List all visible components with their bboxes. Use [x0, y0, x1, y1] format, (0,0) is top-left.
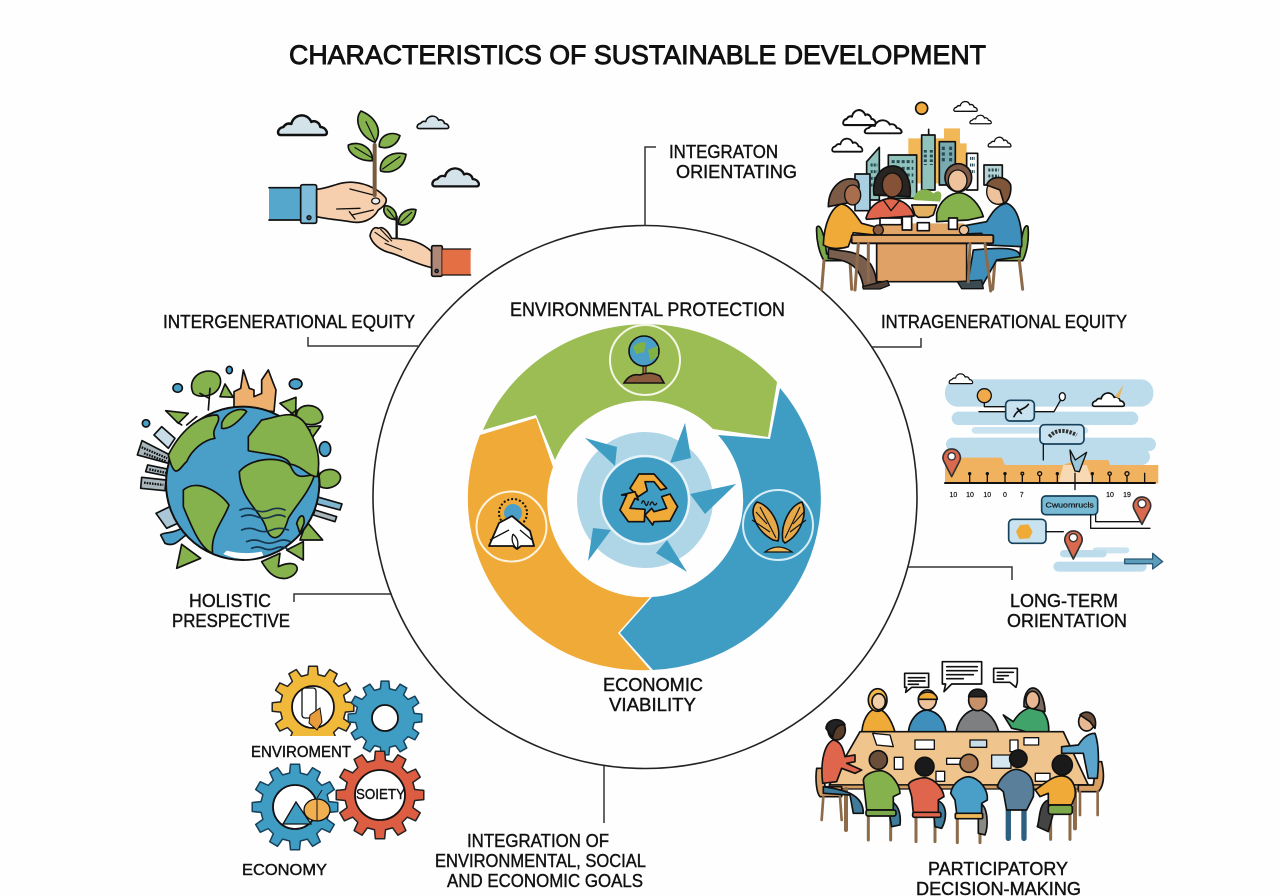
label: holistic perspective	[172, 591, 290, 631]
bowl	[912, 205, 937, 217]
back row people	[862, 688, 1049, 743]
gear label: enviroment: ENVIROMENT	[251, 744, 351, 761]
front row people	[863, 750, 1075, 843]
map pins	[943, 449, 1151, 559]
illustration: participatory meeting	[816, 662, 1103, 843]
table	[852, 235, 993, 291]
gear label: soiety: SOIETY	[356, 786, 405, 803]
label: integration of goals: AND ECONOMIC GOALS	[447, 871, 643, 891]
gear: red	[336, 751, 424, 839]
label: participatory decision-making	[916, 859, 1081, 896]
label: integration orientating: INTEGRATON	[669, 142, 778, 162]
tick marks	[969, 472, 1145, 490]
icon circle: sun and book	[476, 492, 546, 562]
illustration: globe with nature and city	[137, 366, 342, 578]
arrow	[1125, 553, 1163, 569]
illustration: gears	[242, 666, 424, 879]
papers and devices	[873, 733, 1050, 781]
panel: central cycle diagram	[468, 324, 821, 670]
label: long-term orientation: ORIENTATION	[1007, 611, 1127, 631]
label: holistic perspective: HOLISTIC	[189, 591, 271, 611]
label: participatory decision-making: PARTICIPATORY	[928, 859, 1068, 879]
label: integration orientating	[669, 142, 797, 182]
heading: economic viability line 2: VIABILITY	[609, 695, 696, 715]
connector lines	[294, 147, 1012, 823]
label: long-term orientation: LONG-TERM	[1010, 591, 1118, 611]
gear: blue	[348, 681, 422, 755]
ground band	[945, 458, 1158, 483]
illustration: community at table with city	[817, 102, 1028, 291]
inner arrows	[585, 423, 736, 572]
tick labels: 10	[966, 492, 974, 499]
clouds and sun	[949, 374, 1124, 406]
waves	[240, 508, 290, 550]
heading: environmental protection: ENVIRONMENTAL PROTECTION	[510, 300, 785, 321]
clouds	[832, 102, 1011, 152]
icon circle: wheat leaves	[743, 490, 813, 560]
chairs	[817, 226, 1028, 261]
person: man in blue	[957, 177, 1022, 289]
label: integration of goals: ENVIRONMENTAL, SOCIAL	[435, 851, 646, 871]
outer circle	[373, 226, 917, 768]
sky bands	[945, 379, 1156, 572]
person: woman in red	[866, 166, 914, 219]
label: integration of goals: INTEGRATION OF	[467, 831, 609, 851]
speech bubbles	[905, 662, 1017, 692]
tick labels: 7	[1020, 492, 1024, 499]
person: left in red	[816, 720, 863, 820]
tick labels: 0	[1003, 492, 1007, 499]
person: woman in yellow	[823, 179, 889, 289]
table	[829, 732, 1088, 785]
outer features: buildings and trees	[137, 366, 342, 578]
label: long-term orientation	[1007, 591, 1127, 631]
gear label: economy: ECONOMY	[242, 862, 327, 879]
tick labels: 10	[983, 492, 991, 499]
table base	[867, 223, 977, 282]
icon: recycling	[620, 474, 678, 525]
tick labels	[949, 492, 1131, 499]
illustration: timeline	[943, 374, 1163, 572]
person: woman in green	[937, 164, 983, 222]
label: integration orientating: ORIENTATING	[676, 162, 797, 182]
label: intergenerational equity: INTERGENERATIONAL EQUITY	[163, 312, 415, 332]
blue arrow segment: social	[620, 388, 821, 670]
label: holistic perspective: PRESPECTIVE	[172, 611, 290, 631]
continents	[168, 409, 319, 553]
tick labels: 10	[949, 492, 957, 499]
icon circle: earth sapling	[610, 325, 680, 395]
green arrow segment: environmental protection	[483, 324, 777, 460]
callout boxes	[1006, 400, 1034, 421]
person: right in blue	[1062, 712, 1103, 815]
tick labels: 19	[1123, 492, 1131, 499]
inner ring	[577, 432, 713, 568]
title: CHARACTERISTICS OF SUSTAINABLE DEVELOPMENT	[289, 40, 986, 70]
gear: yellow	[270, 666, 360, 750]
illustration: timeline: Cwuomrucls	[1045, 502, 1094, 509]
cups	[880, 217, 957, 231]
globe sphere	[166, 407, 319, 560]
heading: economic viability: ECONOMIC	[603, 675, 703, 695]
orange arrow segment: economic	[468, 418, 650, 670]
center hub	[601, 456, 689, 544]
skyline	[855, 128, 1002, 211]
illustration: hands passing seedling	[269, 111, 479, 276]
tick labels: 10	[1106, 492, 1114, 499]
sun	[916, 102, 928, 114]
label: integration of goals	[435, 831, 646, 891]
label: intragenerational equity: INTRAGENERATIONAL EQUITY	[881, 312, 1127, 332]
gear: blue with mountain	[252, 764, 338, 850]
